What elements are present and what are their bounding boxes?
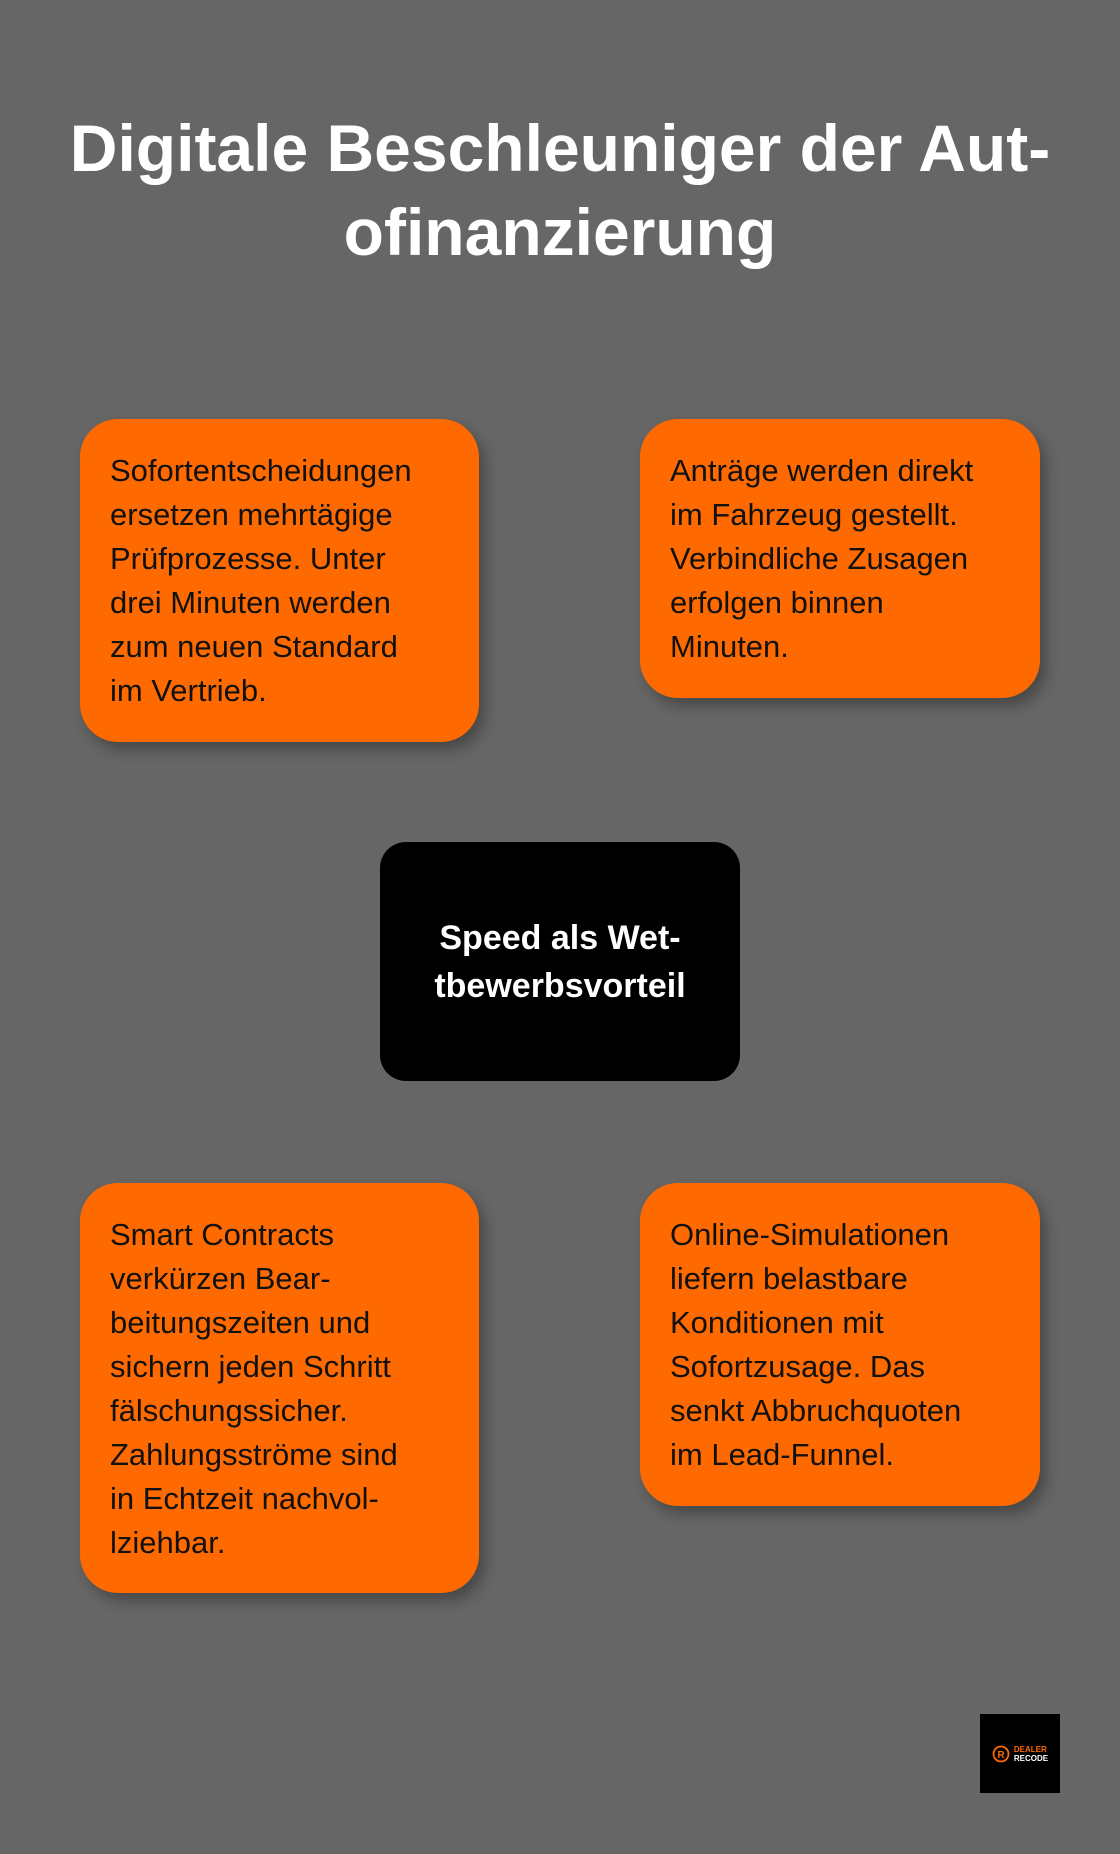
card: bottom left: in Echtzeit nachvol-	[110, 1481, 379, 1516]
card: top right	[640, 419, 1040, 698]
card: top left: Sofortentscheidungen	[110, 453, 412, 488]
card: bottom left: sichern jeden Schritt	[110, 1349, 391, 1384]
card: bottom right: Konditionen mit	[670, 1305, 884, 1340]
card: top left: zum neuen Standard	[110, 629, 398, 664]
title: ofinanzierung	[344, 195, 776, 269]
center box	[380, 842, 740, 1081]
title: Digitale Beschleuniger der Aut-	[70, 111, 1050, 185]
card: bottom right: senkt Abbruchquoten	[670, 1393, 961, 1428]
card: top right: erfolgen binnen	[670, 585, 884, 620]
card: top left: ersetzen mehrtägige	[110, 497, 393, 532]
logo: R	[997, 1750, 1005, 1760]
logo: RECODE	[1014, 1754, 1048, 1762]
center box: tbewerbsvorteil	[434, 966, 686, 1004]
card: top right: Anträge werden direkt	[670, 453, 973, 488]
card: bottom left	[80, 1183, 479, 1593]
card: bottom right	[640, 1183, 1040, 1506]
title	[70, 111, 1050, 269]
card: bottom left: lziehbar.	[110, 1525, 225, 1560]
card: top left: im Vertrieb.	[110, 673, 267, 708]
card: top left	[80, 419, 479, 742]
card: bottom left: Smart Contracts	[110, 1217, 334, 1252]
card: top left: Prüfprozesse. Unter	[110, 541, 386, 576]
card: top right: Verbindliche Zusagen	[670, 541, 968, 576]
card: bottom left: Zahlungsströme sind	[110, 1437, 398, 1472]
card: bottom right: im Lead-Funnel.	[670, 1437, 894, 1472]
card: top left: drei Minuten werden	[110, 585, 391, 620]
card: bottom left: fälschungssicher.	[110, 1393, 348, 1428]
card: top right: Minuten.	[670, 629, 789, 664]
logo: DEALER	[1014, 1744, 1047, 1754]
card: bottom left: beitungszeiten und	[110, 1305, 370, 1340]
logo	[980, 1714, 1060, 1793]
card: bottom left: verkürzen Bear-	[110, 1261, 331, 1296]
card: bottom right: Sofortzusage. Das	[670, 1349, 925, 1384]
card: bottom right: Online-Simulationen	[670, 1217, 949, 1252]
card: top right: im Fahrzeug gestellt.	[670, 497, 958, 532]
card: bottom right: liefern belastbare	[670, 1261, 908, 1296]
center box: Speed als Wet-	[439, 918, 681, 956]
